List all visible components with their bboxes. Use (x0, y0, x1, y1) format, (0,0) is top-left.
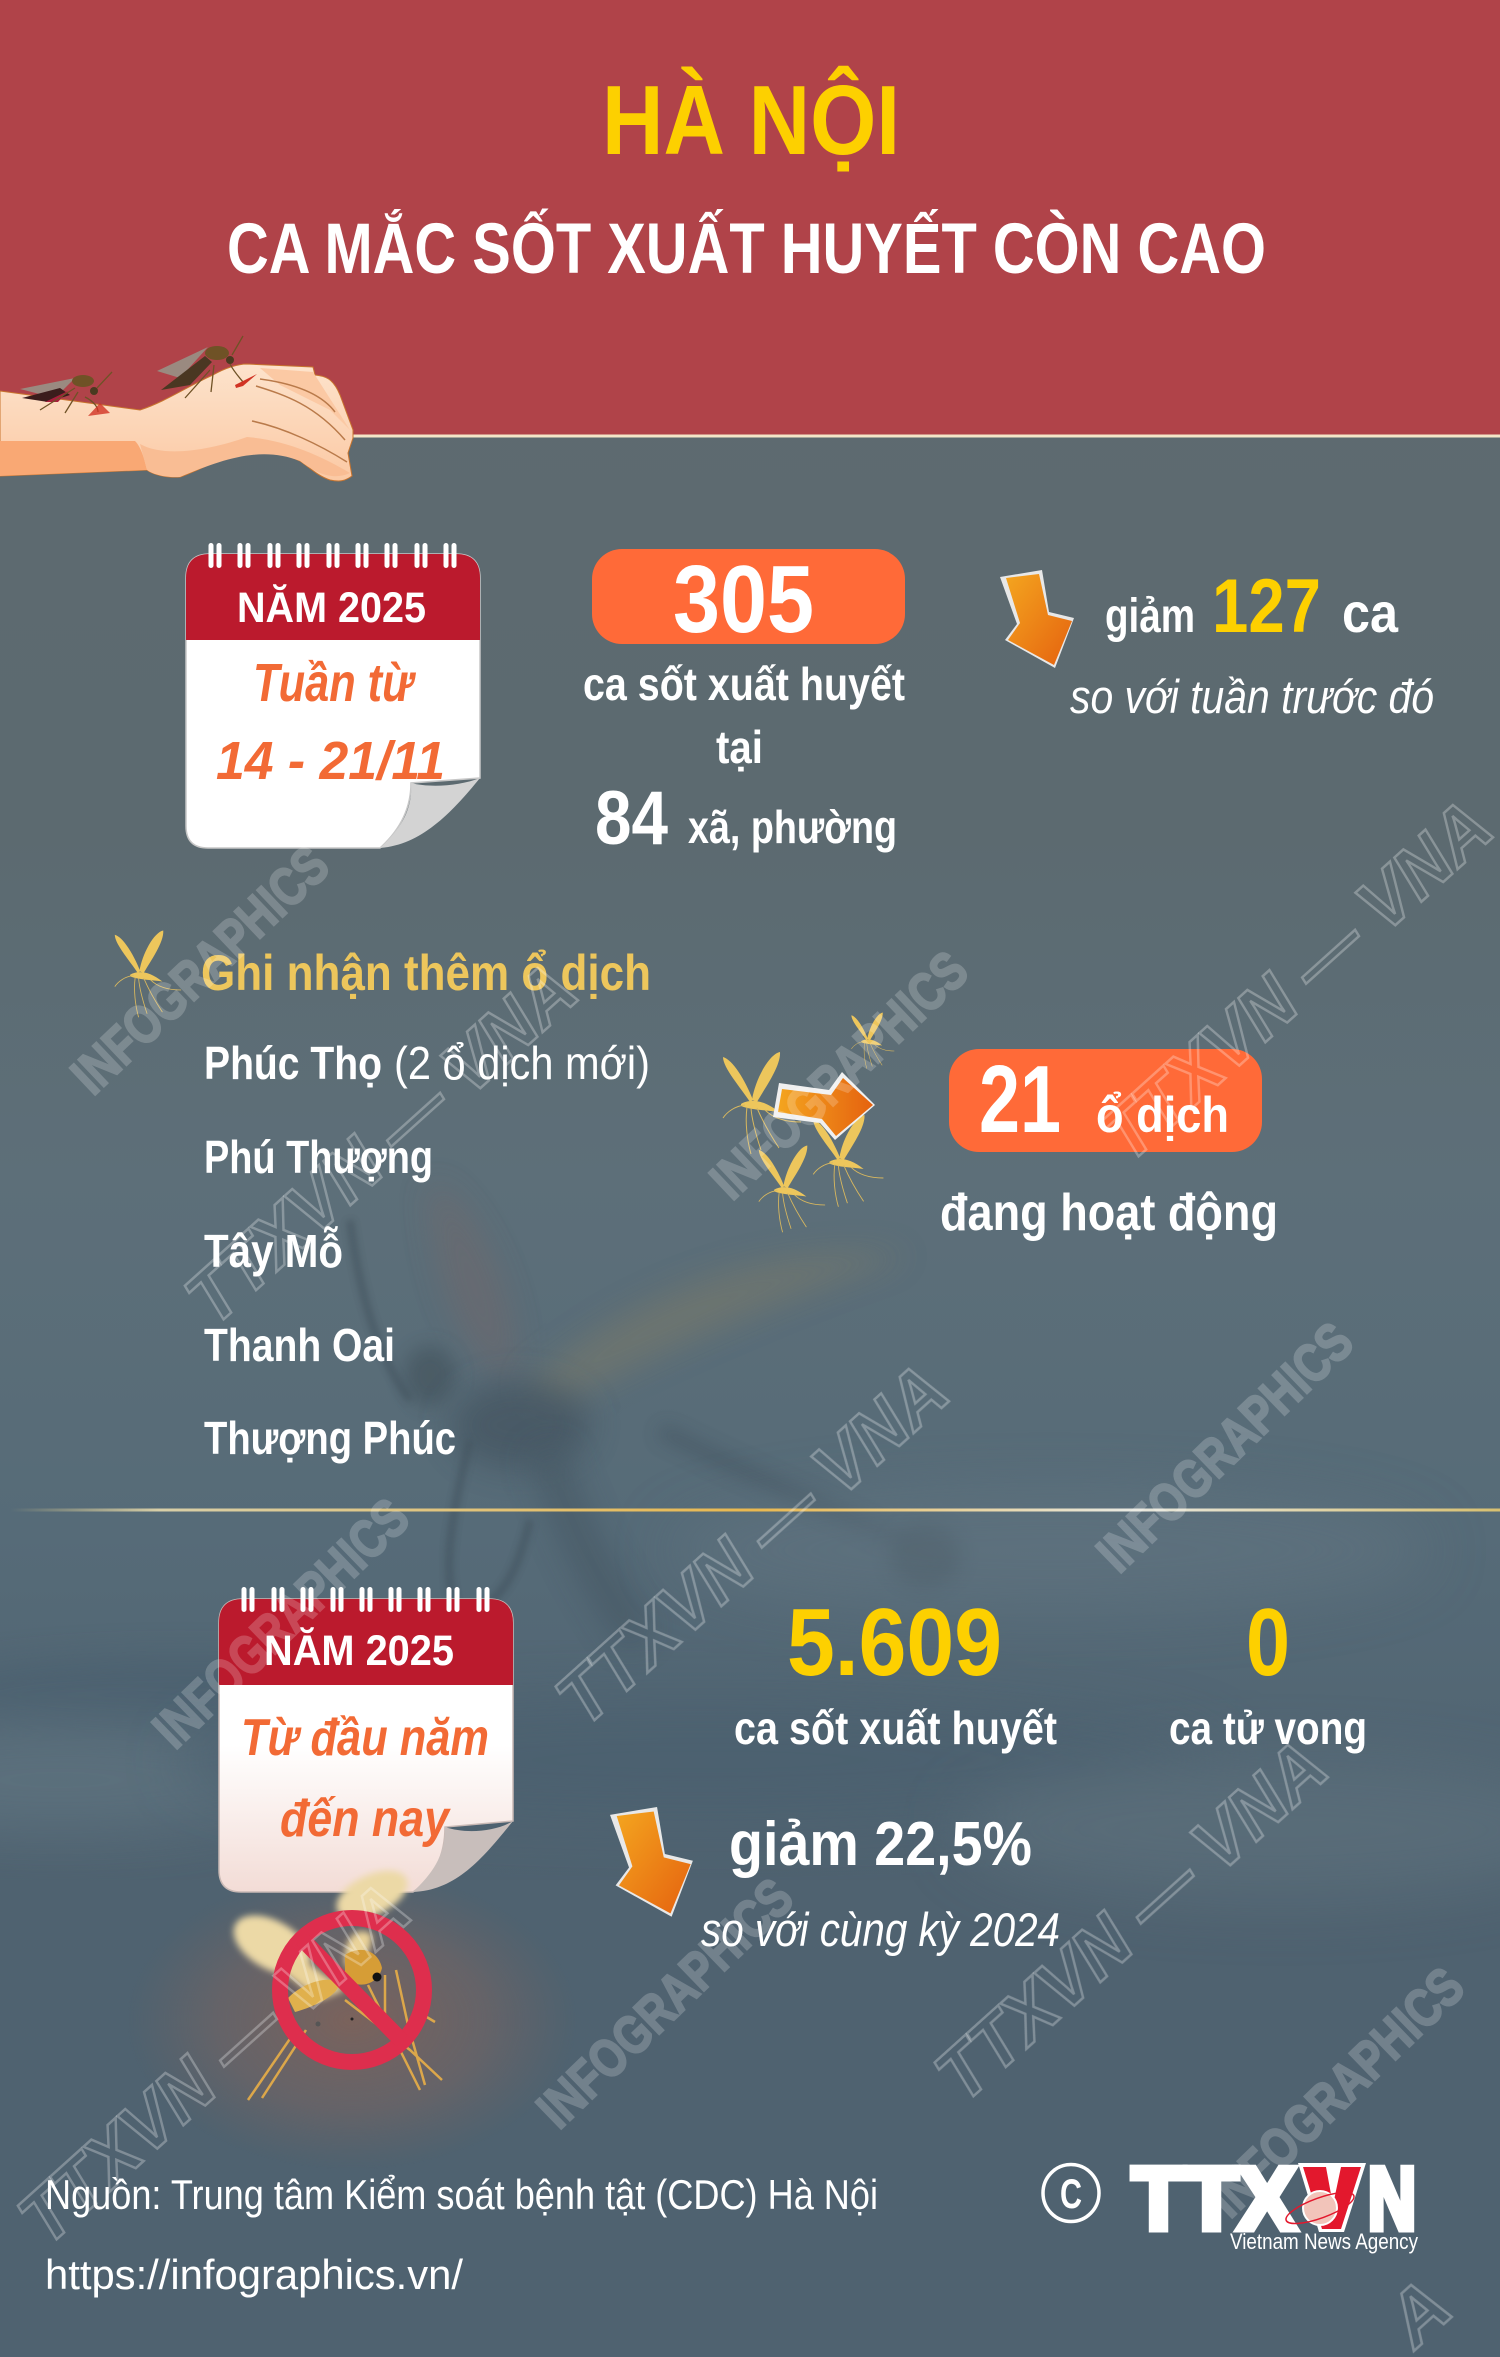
watermark layer (2, 784, 1500, 2357)
copyright mark: C (1060, 2170, 1082, 2217)
comparison note: so với cùng kỳ 2024 (701, 1903, 1060, 1956)
stat: 21 active outbreaks (940, 1046, 1278, 1242)
pill 21 (949, 1046, 1262, 1153)
stat: decrease 127: 127 (1212, 564, 1321, 649)
calendar year: NĂM 2025 (264, 1627, 454, 1675)
label active: đang hoạt động (940, 1184, 1278, 1242)
mosquito 2 (157, 336, 257, 398)
list item: (2 ổ dịch mới) (394, 1037, 650, 1089)
prohibition sign (280, 1918, 424, 2062)
stat: 5.609 cases (734, 1589, 1057, 1754)
stat: decrease 22.5%: giảm 22,5% (729, 1810, 1032, 1879)
stat: decrease 127 (1070, 564, 1434, 723)
icon: down arrow (610, 1807, 693, 1917)
watermark: infographics 4: INFOGRAPHICS (142, 1487, 421, 1760)
icon: no mosquito sign (224, 1861, 442, 2100)
list of outbreaks (204, 1037, 650, 1464)
copyright mark (1043, 2164, 1099, 2222)
icon: mosquitoes and arrow (723, 1012, 894, 1232)
source (45, 2171, 878, 2298)
stat: 0 deaths (1169, 1589, 1367, 1754)
icon: down arrow (1000, 570, 1074, 668)
mosquito 1 (20, 372, 112, 416)
stat: 305 cases (583, 546, 905, 861)
icon: arm with mosquitoes (0, 336, 353, 481)
watermark: infographics 5: INFOGRAPHICS (526, 1867, 805, 2140)
calendar year: NĂM 2025 (237, 584, 426, 632)
list item: Phú Thượng (204, 1131, 433, 1183)
calendar line 1: Từ đầu năm (241, 1709, 489, 1767)
stat: decrease 127: ca (1342, 581, 1399, 644)
calendar line 2: đến nay (280, 1790, 452, 1848)
logo: TTXVN (1132, 2149, 1418, 2254)
label at: tại (716, 721, 763, 773)
logo: TTXVN: N (1368, 2149, 1416, 2248)
calendar line 2: 14 - 21/11 (216, 731, 445, 791)
list item (204, 1037, 650, 1089)
rings (208, 543, 456, 568)
background photo: fabric (0, 1490, 1500, 1900)
mosquito legs (248, 1970, 442, 2100)
watermark: ttxvn 4: TTXVN — VNA (919, 1724, 1343, 2117)
page fold (380, 778, 480, 848)
label deaths: ca tử vong (1169, 1702, 1367, 1754)
label cases: ca sốt xuất huyết (583, 658, 905, 710)
glow behind mosquito (127, 1870, 577, 2170)
list item: Thanh Oai (204, 1319, 395, 1371)
list item: Thượng Phúc (204, 1412, 456, 1464)
title: HÀ NỘI (602, 65, 900, 175)
logo: TTXVN: TTX (1132, 2149, 1296, 2248)
heading: new outbreaks: Ghi nhận thêm ổ dịch (201, 945, 651, 1001)
url: https://infographics.vn/ (45, 2251, 463, 2298)
pill 21: ổ dịch (1096, 1087, 1229, 1143)
stat: 0 deaths: 0 (1246, 1589, 1290, 1696)
arm and hand (0, 364, 353, 481)
calendar: year to date (219, 1587, 513, 1892)
watermark: infographics 3: INFOGRAPHICS (1086, 1311, 1365, 1584)
comparison note: so với tuần trước đó (1070, 670, 1434, 723)
page fold (413, 1821, 513, 1892)
background photo: blurred mosquito (350, 1180, 961, 1640)
stat: decrease 22.5% (701, 1810, 1060, 1956)
label communes: xã, phường (688, 801, 897, 853)
source: Nguồn: Trung tâm Kiểm soát bệnh tật (CDC) Hà Nội (45, 2171, 878, 2218)
calendar line 1: Tuần từ (253, 653, 417, 713)
panel: header (0, 0, 1500, 438)
watermark: infographics 1: INFOGRAPHICS (60, 835, 341, 1106)
logo tagline: Vietnam News Agency (1230, 2229, 1418, 2254)
watermark: ttxvn 2: TTXVN — VNA (169, 947, 593, 1340)
pill 305 (592, 546, 905, 653)
rings (242, 1587, 490, 1612)
watermark: ttxvn 3: TTXVN — VNA (540, 1348, 964, 1741)
list item: Tây Mỗ (204, 1225, 343, 1277)
number 84: 84 (595, 776, 668, 861)
calendar: week (186, 543, 480, 848)
stat: decrease 127: giảm (1105, 590, 1195, 643)
pill 305: 305 (673, 546, 814, 653)
subtitle: CA MẮC SỐT XUẤT HUYẾT CÒN CAO (227, 209, 1266, 289)
stat: 5.609 cases: 5.609 (787, 1589, 1002, 1696)
watermark: infographics 2: INFOGRAPHICS (699, 940, 980, 1211)
list item: Phúc Thọ (204, 1037, 382, 1089)
label cases: ca sốt xuất huyết (734, 1702, 1057, 1754)
mosquito wings (224, 1861, 415, 2000)
watermark: ttxvn 5: TTXVN — VNA (2, 1867, 426, 2260)
pill 21: 21 (979, 1046, 1061, 1153)
mosquito body (288, 1980, 338, 2012)
icon: mosquito heading (115, 930, 181, 1017)
